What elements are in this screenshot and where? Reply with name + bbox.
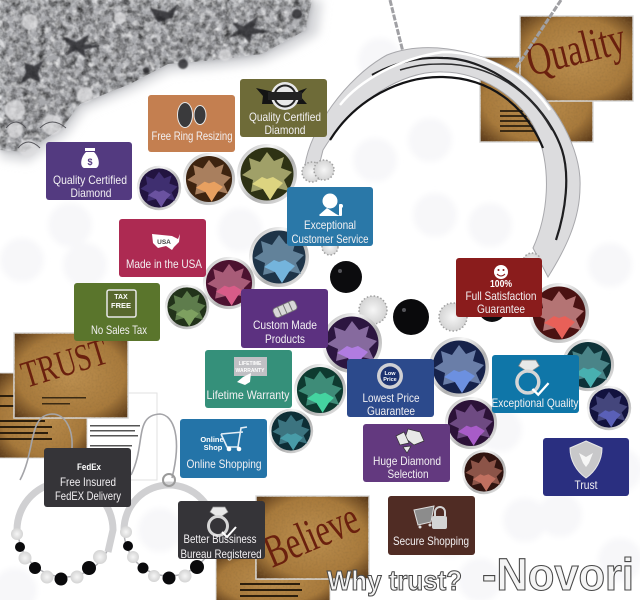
icon: warranty certificate — [234, 357, 267, 385]
necklace ring band — [305, 48, 580, 277]
text: Exceptional Quality — [492, 396, 578, 410]
gemstones — [137, 144, 631, 494]
parchment front sheet — [256, 492, 369, 579]
parchment: quality — [480, 12, 633, 142]
icon: rings — [178, 102, 206, 128]
icon: warranty certificate: LIFETIME — [239, 361, 262, 367]
icon: online shop cart: Online — [200, 435, 224, 444]
icon: best value badge — [256, 82, 307, 110]
card: lifetime warranty — [205, 350, 292, 408]
card: online shopping — [180, 419, 267, 478]
icon: tax free: TAX — [114, 294, 128, 301]
parchment back sheet — [216, 555, 330, 600]
card: no sales tax — [74, 283, 160, 341]
text: Full Satisfaction — [466, 289, 536, 303]
icon: low price seal — [377, 363, 403, 389]
text: Trust — [574, 478, 598, 492]
card: lowest price guarantee — [347, 359, 434, 418]
icon: low price seal: Low — [384, 371, 396, 377]
card: made in the usa — [119, 219, 206, 277]
gem: olive — [237, 144, 297, 204]
icon: customer service agent — [319, 194, 343, 216]
gem: pink — [203, 257, 255, 309]
gem: dark teal — [269, 409, 313, 453]
card: secure shopping — [388, 496, 475, 555]
card: free insured fedex delivery — [44, 448, 131, 507]
gem: magenta purple — [445, 397, 497, 449]
gem: orange — [183, 153, 235, 205]
card: quality certified diamond olive — [240, 79, 327, 137]
card: huge diamond selection — [363, 424, 450, 482]
icon: ring with check — [517, 360, 549, 395]
text: Guarantee — [477, 302, 525, 316]
diamonds pile top left — [0, 0, 322, 162]
icon: tax free — [107, 290, 136, 317]
parchment front sheet: Believe — [256, 492, 366, 577]
icon: low price seal: Price — [383, 377, 397, 383]
card: better business bureau registered — [178, 501, 265, 561]
parchment back sheet — [0, 373, 87, 458]
gem: blue — [429, 337, 489, 397]
necklace beads — [302, 160, 541, 335]
earrings — [11, 414, 214, 586]
text: Custom Made — [253, 318, 317, 332]
card: trust — [543, 438, 629, 496]
icon: tax free: FREE — [111, 301, 131, 310]
text: Customer Service — [292, 232, 369, 246]
gem: brown red — [462, 450, 506, 494]
text: Made in the USA — [126, 257, 202, 271]
text: 100% — [490, 279, 512, 290]
parchment: believe — [216, 492, 369, 600]
gem: red — [529, 283, 589, 343]
gem: large purple — [322, 313, 382, 373]
text: Huge Diamond — [373, 454, 441, 468]
left earring — [11, 414, 113, 586]
icon: ring with check — [208, 507, 236, 537]
text: Lifetime Warranty — [206, 388, 290, 402]
text: No Sales Tax — [91, 323, 147, 337]
right earring — [120, 414, 214, 584]
icon: cart and padlock — [414, 506, 447, 529]
text: Diamond — [70, 186, 112, 200]
icon: smiley — [494, 265, 508, 279]
text: Better Bussiness — [184, 532, 256, 546]
text: Free Insured — [60, 475, 116, 489]
text: Bureau Registered — [180, 547, 262, 561]
text: Online Shopping — [186, 457, 262, 471]
text: Exceptional — [304, 218, 356, 232]
white paper sheet — [87, 393, 157, 480]
gem: navy — [587, 386, 631, 430]
gem: teal — [562, 339, 614, 391]
card: exceptional quality — [492, 355, 579, 413]
text: Free Ring Resizing — [152, 129, 232, 143]
parchment: trust — [0, 331, 157, 480]
card: free ring resizing — [148, 95, 235, 152]
icon: online shop cart: Shop — [204, 443, 223, 452]
text: Guarantee — [367, 404, 415, 418]
gem: green — [165, 285, 209, 329]
parchment front sheet: TRUST — [16, 331, 113, 397]
gem: steel blue — [249, 227, 309, 287]
parchment front sheet — [14, 331, 128, 418]
necklace — [302, 0, 580, 335]
text: Selection — [388, 467, 428, 481]
title: novori: -Novori — [482, 549, 634, 600]
icon: money bag: $ — [87, 157, 93, 167]
necklace chains — [390, 0, 561, 68]
card: quality certified diamond purple — [46, 142, 132, 200]
icon: shield — [570, 441, 602, 478]
paper text lines — [90, 425, 140, 446]
text: Lowest Price — [362, 391, 420, 405]
icon: online shop cart — [200, 427, 247, 452]
icon: ring band — [272, 300, 298, 318]
text: FedEX Delivery — [55, 489, 121, 503]
text: Quality Certified — [249, 110, 321, 124]
parchment back sheet — [480, 57, 593, 142]
card: custom made products — [241, 289, 328, 348]
text: Quality Certified — [53, 173, 127, 187]
icon: diamonds — [396, 429, 424, 453]
text: Products — [265, 332, 305, 346]
icon: fedex wordmark: FedEx — [77, 462, 101, 472]
text: Secure Shopping — [393, 534, 469, 548]
gem: mint — [294, 364, 346, 416]
icon: warranty certificate: WARRANTY — [236, 368, 265, 374]
text: Diamond — [264, 123, 306, 137]
card: full satisfaction guarantee — [456, 258, 542, 317]
icon: usa map: USA — [157, 239, 171, 246]
title: why trust: Why trust? — [327, 565, 462, 596]
gem: dark purple — [137, 166, 181, 210]
card: exceptional customer service — [287, 187, 373, 246]
